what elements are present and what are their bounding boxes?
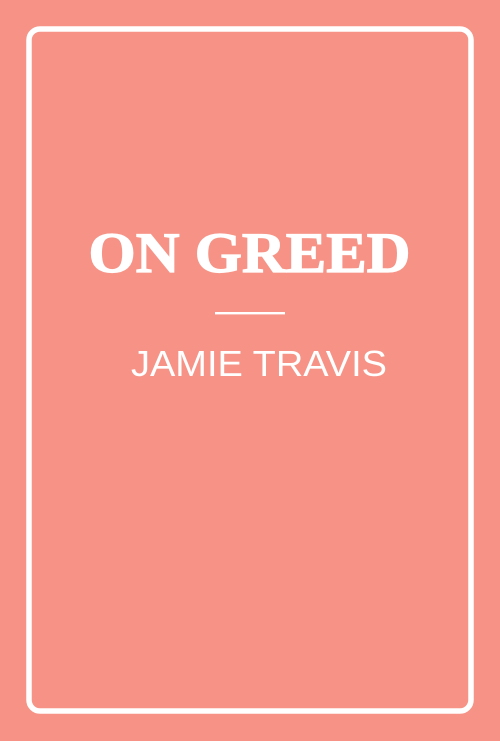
title: ON GREED — [88, 222, 410, 285]
divider line — [215, 312, 285, 314]
author name: JAMIE TRAVIS — [131, 343, 387, 384]
